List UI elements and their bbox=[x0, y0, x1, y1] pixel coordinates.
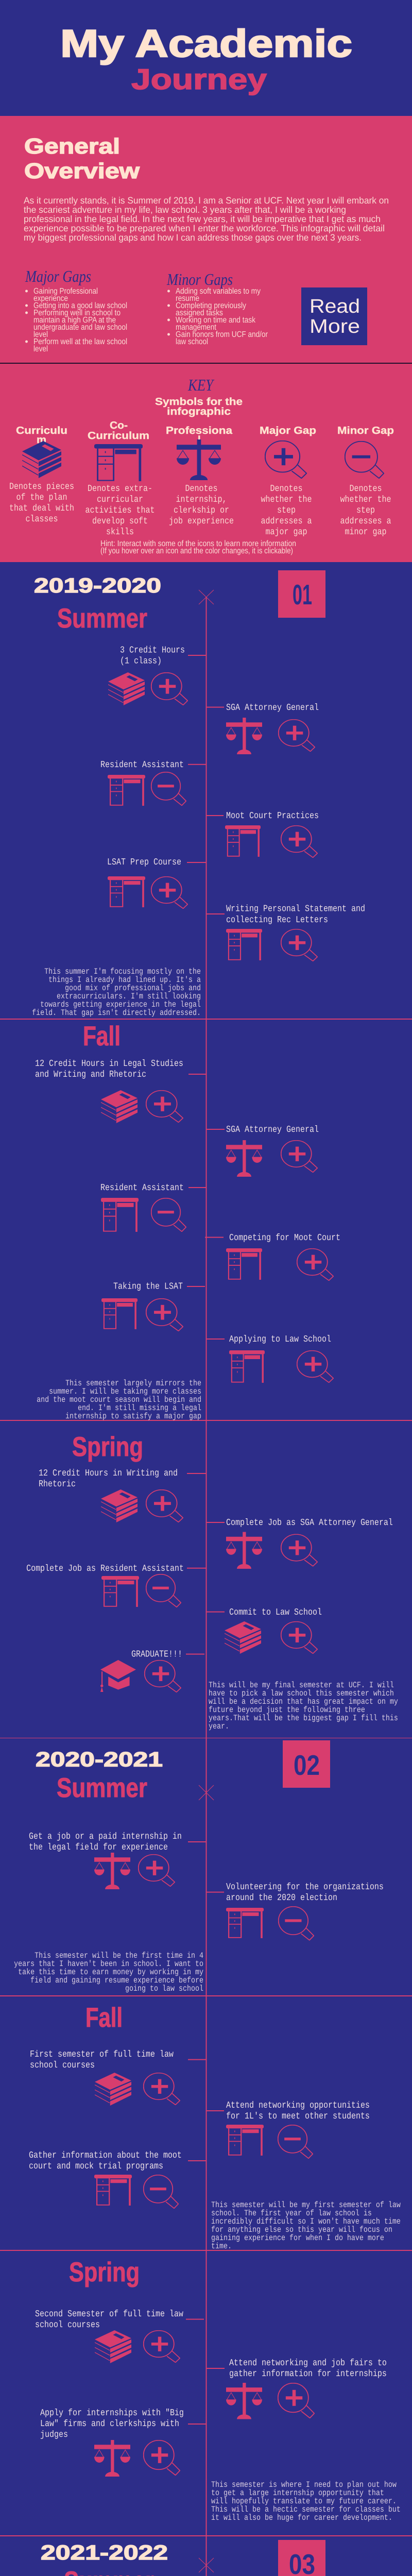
note: fall 2019: summer. I will be taking more classes bbox=[49, 1387, 201, 1396]
minor gaps list: Working on time and task bbox=[176, 316, 256, 325]
year badge: 03 bbox=[278, 2540, 325, 2576]
note: summer 2019: extracurriculars. I'm still looking bbox=[57, 992, 201, 1001]
note: fall 2020: gaining experience for when I do have more bbox=[211, 2233, 384, 2243]
note: summer 2020: going to law school bbox=[125, 1984, 203, 1993]
minor gaps list bbox=[166, 270, 268, 346]
panel: general overview background bbox=[0, 116, 412, 562]
panel: timeline background bbox=[0, 562, 412, 2576]
key: major gap: Major Gap bbox=[260, 425, 316, 436]
note: summer 2019: field. That gap isn't directly addressed. bbox=[32, 1008, 201, 1018]
key: professional bbox=[166, 425, 234, 527]
year badge: 02 bbox=[283, 1740, 330, 1788]
key heading bbox=[155, 376, 243, 417]
step: competing for moot court bbox=[205, 1233, 340, 1280]
note: spring 2020: future beyond just the following three bbox=[209, 1705, 365, 1715]
note: fall 2020: school. The first year of law school is bbox=[211, 2209, 372, 2218]
key: co-curriculum bbox=[85, 420, 154, 537]
key: professional: clerkship or bbox=[174, 505, 229, 516]
key: minor gap: step bbox=[356, 505, 375, 516]
key: curriculum: m bbox=[37, 434, 46, 446]
year heading: 2020-2021: 2020-2021 bbox=[36, 1749, 163, 1771]
button: read more: More bbox=[310, 316, 360, 337]
minor gaps list: Adding soft variables to my bbox=[176, 287, 261, 296]
note: spring 2021: to get a large internship opportunity that bbox=[211, 2488, 384, 2498]
note: summer 2019: good mix of professional jobs and bbox=[65, 984, 201, 993]
major gaps list: maintain a high GPA at the bbox=[33, 316, 116, 325]
key: major gap: Denotes bbox=[270, 484, 302, 494]
minor gaps list: Completing previously bbox=[176, 301, 246, 310]
note: spring 2021: This semester is where I need to plan out how bbox=[211, 2480, 397, 2489]
minor gaps list: Gain honors from UCF and/or bbox=[176, 330, 268, 339]
year badge: 01 bbox=[278, 570, 325, 618]
title: Journey bbox=[131, 63, 267, 95]
year badge: 01: 01 bbox=[293, 579, 312, 611]
step: apply for internships bbox=[40, 2408, 206, 2477]
step: commit to law school: Commit to Law School bbox=[229, 1607, 322, 1618]
step: attend networking bbox=[207, 2100, 370, 2158]
key: professional: Denotes bbox=[185, 484, 217, 494]
step: complete sga job: Complete Job as SGA Attorney General bbox=[226, 1518, 393, 1528]
step: graduate: GRADUATE!!! bbox=[131, 1650, 182, 1660]
step: second semester bbox=[35, 2309, 204, 2363]
note: fall 2020: This semester will be my first semester of law bbox=[211, 2200, 401, 2210]
year heading: 2021-2022: 2021-2022 bbox=[41, 2541, 168, 2564]
major gaps list: experience bbox=[33, 294, 68, 303]
step: resident assistant fall: Resident Assistant bbox=[100, 1183, 184, 1193]
step: complete ra job bbox=[26, 1564, 206, 1607]
step: resident assistant: Resident Assistant bbox=[100, 760, 184, 770]
overview paragraph: professional in the legal field. In the next few years, it will be imperative that I get as much bbox=[24, 214, 381, 224]
key: curriculum: Denotes pieces bbox=[9, 482, 74, 492]
step: volunteering: around the 2020 election bbox=[226, 1893, 337, 1903]
step: writing personal statement: collecting Rec Letters bbox=[226, 915, 328, 925]
overview paragraph bbox=[24, 195, 389, 243]
season: spring 2020: Spring bbox=[72, 1432, 143, 1462]
step: first semester: First semester of full time law bbox=[30, 2049, 174, 2060]
button: read more bbox=[301, 287, 367, 345]
note: summer 2020: field and gaining resume experience before bbox=[30, 1976, 203, 1985]
step: complete ra job: Complete Job as Resident Assistant bbox=[26, 1564, 184, 1574]
step: commit to law school bbox=[207, 1607, 322, 1654]
step: 3 credit hours bbox=[108, 645, 206, 705]
step: 12 credit hours: and Writing and Rhetoric bbox=[35, 1070, 146, 1080]
step: attend networking: for 1L's to meet other students bbox=[226, 2111, 370, 2122]
major gaps list: Getting into a good law school bbox=[33, 301, 127, 310]
major gaps list: level bbox=[33, 330, 48, 339]
note: spring 2021: it will also be huge for career development. bbox=[211, 2513, 392, 2522]
timeline spine bbox=[206, 597, 207, 2576]
step: 3 credit hours: 3 Credit Hours bbox=[120, 645, 185, 655]
step: sga attorney general bbox=[207, 703, 319, 754]
step: get a job: Get a job or a paid internship in bbox=[29, 1832, 182, 1842]
step: applying to law school bbox=[207, 1334, 333, 1383]
button: read more: Read bbox=[310, 296, 360, 317]
key: curriculum: that deal with bbox=[9, 503, 74, 514]
step: 12 credit hours bbox=[35, 1059, 206, 1123]
step: attend networking: Attend networking opportunities bbox=[226, 2100, 370, 2111]
season: spring 2021: Spring bbox=[69, 2257, 140, 2287]
overview paragraph: my biggest professional gaps and how I can address those gaps over the next 3 years. bbox=[24, 232, 362, 243]
key: co-curriculum: Co- bbox=[110, 420, 128, 431]
step: first semester: school courses bbox=[30, 2060, 95, 2071]
title bbox=[60, 22, 352, 95]
major gaps list: undergraduate and law school bbox=[33, 323, 127, 332]
key: curriculum: classes bbox=[26, 514, 58, 524]
step: applying to law school: Applying to Law School bbox=[229, 1334, 331, 1345]
note: fall 2019: end. I'm still missing a legal bbox=[78, 1403, 201, 1413]
step: sga attorney general: SGA Attorney General bbox=[226, 703, 319, 713]
key: professional: internship, bbox=[176, 495, 227, 505]
note: summer 2020: years that I haven't been in school. I want to bbox=[14, 1959, 203, 1969]
step: taking the lsat: Taking the LSAT bbox=[113, 1282, 183, 1292]
key heading: infographic bbox=[167, 406, 231, 417]
note: spring 2020: have to pick a law school this semester which bbox=[209, 1689, 394, 1698]
season: summer 2020: Summer bbox=[57, 1773, 147, 1803]
season: fall 2019: Fall bbox=[83, 1021, 121, 1052]
key: professional: l bbox=[198, 434, 201, 446]
step: volunteering: Volunteering for the organizations bbox=[226, 1882, 384, 1892]
step: volunteering bbox=[207, 1882, 384, 1940]
key: professional: job experience bbox=[169, 516, 234, 527]
note: summer 2020: This semester will be the first time in 4 bbox=[35, 1951, 203, 1960]
step: gather information bbox=[29, 2150, 206, 2208]
step: 12 credit hours: 12 Credit Hours in Legal Studies bbox=[35, 1059, 183, 1069]
key: co-curriculum: develop soft bbox=[92, 516, 148, 527]
step: sga attorney general fall bbox=[207, 1125, 319, 1177]
overview paragraph: the scariest adventure in my life, law school. 3 years after that, I will be a working bbox=[24, 205, 346, 215]
key: major gap bbox=[260, 425, 316, 537]
step: 12 credit hours spring: Rhetoric bbox=[39, 1479, 76, 1489]
season: summer 2019: Summer bbox=[57, 603, 147, 634]
key heading: KEY bbox=[187, 376, 215, 394]
step: resident assistant fall bbox=[100, 1183, 206, 1232]
step: lsat prep course bbox=[107, 857, 206, 908]
note: fall 2020 bbox=[211, 2200, 401, 2251]
key: curriculum bbox=[9, 425, 74, 524]
key: curriculum: of the plan bbox=[16, 493, 67, 503]
step: lsat prep course: LSAT Prep Course bbox=[107, 857, 181, 868]
major gaps list: Perform well at the law school bbox=[33, 337, 127, 346]
step: gather information: Gather information about the moot bbox=[29, 2150, 182, 2161]
step: get a job bbox=[29, 1832, 206, 1889]
note: summer 2019: things I already had lined up. It's a bbox=[48, 975, 201, 985]
timeline x mark bbox=[199, 590, 214, 604]
step: graduate bbox=[100, 1650, 204, 1692]
key: minor gap: Minor Gap bbox=[337, 425, 394, 436]
note: fall 2019: This semester largely mirrors the bbox=[65, 1379, 201, 1388]
step: apply for internships: judges bbox=[40, 2430, 68, 2440]
note: spring 2020 bbox=[209, 1681, 398, 1731]
step: moot court practices: Moot Court Practices bbox=[226, 811, 319, 821]
heading: general overview: General bbox=[24, 134, 120, 158]
minor gaps list: resume bbox=[176, 294, 199, 303]
note: summer 2020: take this time to earn money by working in my bbox=[18, 1968, 203, 1977]
step: taking the lsat bbox=[101, 1282, 205, 1331]
note: fall 2019 bbox=[37, 1379, 201, 1421]
title: My Academic bbox=[60, 22, 352, 65]
key: major gap: addresses a bbox=[261, 516, 312, 527]
minor gaps list: assigned tasks bbox=[176, 309, 223, 317]
note: summer 2019 bbox=[32, 967, 201, 1018]
step: 3 credit hours: (1 class) bbox=[120, 656, 162, 667]
header panel bbox=[0, 0, 412, 116]
note: spring 2021: This will be a hectic semester for classes but bbox=[211, 2505, 401, 2514]
step: resident assistant bbox=[100, 760, 206, 806]
major gaps list: Gaining Professional bbox=[33, 287, 98, 296]
step: apply for internships: Law" firms and clerkships with bbox=[40, 2419, 179, 2429]
minor gaps list: law school bbox=[176, 337, 208, 346]
timeline x mark bbox=[199, 2558, 214, 2572]
key hint: (If you hover over an icon and the color changes, it is clickable) bbox=[100, 547, 293, 555]
note: summer 2019: This summer I'm focusing mostly on the bbox=[44, 967, 201, 976]
major gaps list bbox=[25, 267, 127, 353]
step: 12 credit hours spring: 12 Credit Hours in Writing and bbox=[39, 1468, 178, 1479]
key heading: Symbols for the bbox=[155, 396, 243, 408]
note: fall 2019: and the moot court season will begin and bbox=[37, 1395, 201, 1404]
step: first semester bbox=[30, 2049, 206, 2106]
step: gather information: court and mock trial programs bbox=[29, 2161, 163, 2172]
key: co-curriculum: curricular bbox=[97, 495, 143, 505]
step: get a job: the legal field for experience bbox=[29, 1842, 168, 1853]
step: second semester: school courses bbox=[35, 2320, 100, 2330]
major gaps list: Performing well in school to bbox=[33, 309, 121, 317]
note: spring 2021 bbox=[211, 2480, 401, 2522]
note: fall 2020: for anything else so this year will focus on bbox=[211, 2225, 392, 2234]
key: curriculum: Curriculu bbox=[16, 425, 67, 436]
year badge: 02: 02 bbox=[294, 1749, 320, 1781]
major gaps list: level bbox=[33, 345, 48, 353]
key: major gap: whether the bbox=[261, 495, 312, 505]
key: major gap: major gap bbox=[266, 527, 307, 537]
overview paragraph: experience possible to be prepared when I enter the workforce. This infographic will detail bbox=[24, 223, 385, 233]
key hint: Hint: Interact with some of the icons to learn more information bbox=[100, 539, 296, 548]
step: apply for internships: Apply for internships with "Big bbox=[40, 2408, 184, 2418]
note: fall 2020: incredibly difficult so I won't have much time bbox=[211, 2217, 401, 2226]
season: fall 2020: Fall bbox=[85, 2003, 123, 2033]
key: minor gap: minor gap bbox=[345, 527, 386, 537]
key: major gap: step bbox=[277, 505, 296, 516]
note: summer 2020 bbox=[14, 1951, 203, 1993]
key: minor gap: Denotes bbox=[350, 484, 382, 494]
timeline x mark bbox=[199, 1785, 214, 1800]
step: networking and job fairs: gather information for internships bbox=[229, 2369, 387, 2379]
step: competing for moot court: Competing for Moot Court bbox=[229, 1233, 340, 1243]
step: complete sga job bbox=[207, 1518, 393, 1569]
minor gaps list: management bbox=[176, 323, 216, 332]
heading: general overview bbox=[24, 134, 140, 183]
minor gaps list: Minor Gaps bbox=[166, 270, 233, 289]
step: writing personal statement bbox=[207, 904, 365, 961]
step: networking and job fairs bbox=[207, 2358, 387, 2419]
step: sga attorney general fall: SGA Attorney General bbox=[226, 1125, 319, 1135]
heading: general overview: Overview bbox=[24, 159, 140, 183]
overview paragraph: As it currently stands, it is Summer of 2019. I am a Senior at UCF. Next year I will embark on bbox=[24, 195, 389, 206]
step: moot court practices bbox=[207, 811, 319, 857]
key: minor gap: addresses a bbox=[340, 516, 391, 527]
note: fall 2020: time. bbox=[211, 2242, 232, 2251]
key hint bbox=[100, 539, 296, 555]
step: second semester: Second Semester of full time law bbox=[35, 2309, 183, 2319]
key: co-curriculum: Denotes extra- bbox=[88, 484, 152, 494]
note: spring 2020: years.That will be the biggest gap I fill this bbox=[209, 1714, 398, 1723]
key: professional: Professiona bbox=[166, 425, 233, 436]
note: spring 2020: This will be my final semester at UCF. I will bbox=[209, 1681, 394, 1690]
note: fall 2019: internship to satisfy a major gap bbox=[65, 1412, 201, 1421]
note: spring 2020: year. bbox=[209, 1722, 229, 1731]
year heading: 2019-2020: 2019-2020 bbox=[34, 574, 161, 597]
key: co-curriculum: Curriculum bbox=[88, 430, 149, 442]
step: networking and job fairs: Attend networking and job fairs to bbox=[229, 2358, 387, 2368]
step: 12 credit hours spring bbox=[39, 1468, 206, 1522]
key: minor gap bbox=[337, 425, 394, 537]
step: writing personal statement: Writing Personal Statement and bbox=[226, 904, 365, 914]
major gaps list: Major Gaps bbox=[25, 267, 91, 285]
note: spring 2020: will be a decision that has great impact on my bbox=[209, 1697, 398, 1706]
key: co-curriculum: skills bbox=[106, 527, 134, 537]
key: co-curriculum: activities that bbox=[85, 505, 154, 516]
note: summer 2019: towards getting experience in the legal bbox=[40, 1000, 201, 1009]
key: minor gap: whether the bbox=[340, 495, 391, 505]
note: spring 2021: will hopefully translate to my future career. bbox=[211, 2497, 397, 2506]
